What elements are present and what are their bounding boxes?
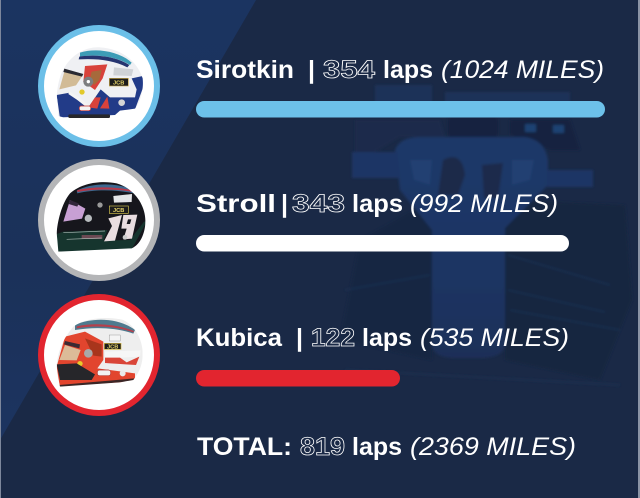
- driver label: Sirotkin: laps: [383, 56, 433, 84]
- total line: (2369 MILES): [410, 433, 576, 461]
- driver label: Sirotkin: Sirotkin: [196, 56, 294, 84]
- bar: Kubica: [196, 370, 400, 386]
- icon: Stroll helmet: [41, 162, 157, 278]
- icon: Kubica helmet: JCB: [107, 344, 118, 350]
- driver label: Kubica: 122: [311, 324, 355, 352]
- driver label: Stroll: laps: [352, 190, 403, 218]
- driver label: Sirotkin: (1024 MILES): [441, 56, 604, 84]
- Sirotkin row: [41, 28, 605, 144]
- icon: Stroll helmet: JCB: [113, 208, 124, 214]
- Kubica row: [41, 297, 569, 413]
- driver label: Stroll: Stroll: [196, 190, 276, 218]
- icon: Sirotkin helmet: [41, 28, 157, 144]
- background: faded race car: [340, 85, 632, 385]
- driver label: Kubica: |: [296, 324, 303, 352]
- driver label: Stroll: |: [281, 190, 288, 218]
- driver label: Kubica: (535 MILES): [420, 324, 569, 352]
- bar: Sirotkin: [196, 101, 605, 118]
- icon: Kubica helmet: [41, 297, 157, 413]
- Stroll row: [41, 162, 569, 278]
- driver label: Stroll: (992 MILES): [410, 190, 558, 218]
- bar: Stroll: [196, 235, 569, 252]
- driver label: Sirotkin: |: [308, 56, 315, 84]
- icon: Sirotkin helmet: JCB: [113, 80, 124, 86]
- total line: 819: [300, 433, 345, 461]
- driver label: Stroll: 343: [292, 190, 345, 218]
- total line: TOTAL:: [197, 433, 292, 461]
- driver label: Kubica: laps: [362, 324, 412, 352]
- driver label: Sirotkin: 354: [323, 56, 375, 84]
- driver label: Kubica: Kubica: [196, 324, 283, 352]
- total line: laps: [352, 433, 402, 461]
